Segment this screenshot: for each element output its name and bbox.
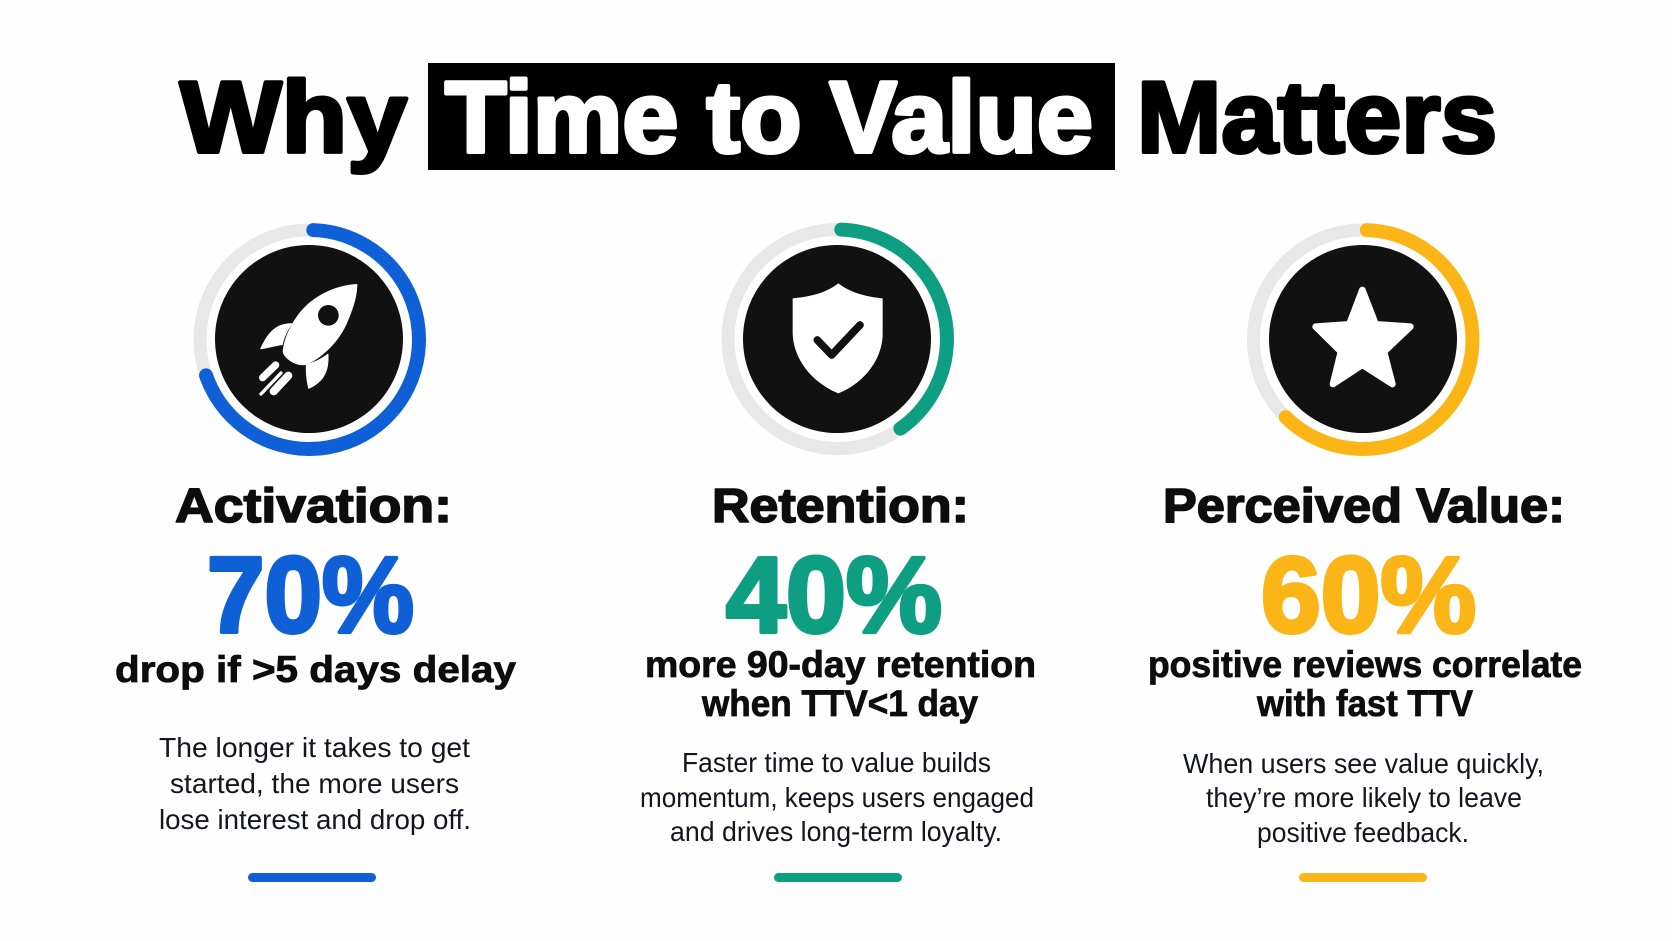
progress ring: activation 70%	[196, 226, 423, 453]
description: perceived value	[1183, 748, 1544, 848]
subheading: activation: drop if >5 days delay	[115, 649, 516, 690]
title highlight band: Time to Value	[445, 62, 1093, 174]
description: retention: Faster time to value builds	[682, 747, 991, 778]
panel: retention	[640, 226, 1036, 882]
accent bar: retention	[774, 873, 902, 882]
title	[180, 62, 1497, 174]
subheading: retention	[645, 644, 1036, 724]
description: activation	[159, 732, 471, 835]
accent bar: perceived value	[1299, 873, 1427, 882]
subheading: perceived value	[1148, 644, 1582, 724]
panel: activation	[115, 226, 516, 882]
stat: 70%: 70%	[207, 534, 414, 655]
heading: retention: Retention:	[712, 480, 969, 533]
description: retention: and drives long-term loyalty.	[670, 816, 1002, 847]
accent bar: activation	[248, 873, 376, 882]
icon: rocket	[260, 284, 357, 394]
progress ring: retention 40%	[724, 226, 951, 452]
subheading: retention: more 90-day retention	[645, 644, 1036, 685]
description: perceived value: When users see value quickly,	[1183, 748, 1544, 779]
description: retention	[640, 747, 1034, 847]
description: perceived value: they’re more likely to leave	[1206, 782, 1522, 813]
heading: activation: Activation:	[175, 480, 452, 533]
title: Why	[180, 62, 407, 174]
subheading: perceived value: with fast TTV	[1256, 683, 1473, 724]
panel: perceived value	[1148, 226, 1582, 882]
description: activation: started, the more users	[170, 768, 459, 799]
subheading: retention: when TTV<1 day	[701, 683, 978, 724]
progress ring: perceived value 60%	[1250, 226, 1476, 453]
description: retention: momentum, keeps users engaged	[640, 782, 1034, 813]
icon: star	[1316, 290, 1410, 384]
subheading: perceived value: positive reviews correlate	[1148, 644, 1582, 685]
description: activation: lose interest and drop off.	[159, 804, 471, 835]
description: perceived value: positive feedback.	[1257, 817, 1469, 848]
title: Matters	[1137, 62, 1497, 174]
description: activation: The longer it takes to get	[159, 732, 470, 763]
stat: 40%: 40%	[726, 534, 942, 655]
icon: shield with check	[793, 283, 883, 393]
heading: perceived value: Perceived Value:	[1163, 480, 1565, 533]
stat: 60%: 60%	[1261, 534, 1476, 655]
